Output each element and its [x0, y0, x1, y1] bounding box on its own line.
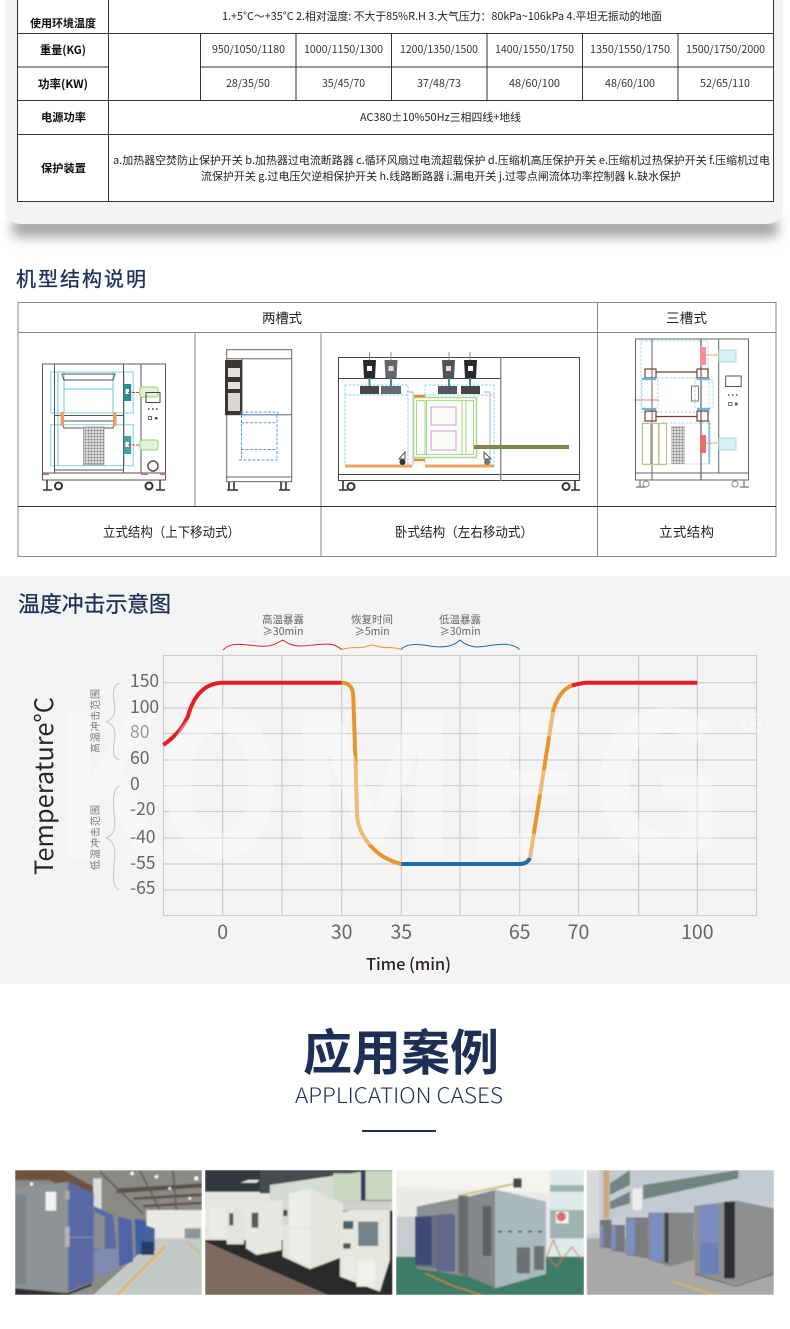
heading: temperature shock diagram: 温度冲击示意图 [18, 587, 171, 619]
heading: model structure: 机型结构说明 [16, 263, 146, 292]
section background [0, 576, 790, 984]
y axis title: Temperature°C [25, 697, 61, 875]
brand watermark [52, 627, 772, 915]
y axis labels: 0 [130, 771, 140, 796]
table row: power: 52/65/110 [700, 76, 750, 91]
drawing: vertical two-zone side view [225, 350, 292, 490]
table row: protection devices [41, 152, 770, 184]
table row: power supply [41, 109, 521, 125]
y axis labels: -55 [130, 850, 156, 875]
table row: weight: 1000/1150/1300 [304, 42, 383, 57]
stage labels: ≥30min [439, 624, 481, 639]
table row: weight: 重量(KG) [40, 42, 86, 58]
panel background [5, 0, 783, 224]
table row: weight: 1500/1750/2000 [686, 42, 765, 57]
table row: protection devices: a.加热器空焚防止保护开关 b.加热器过电流断路器 c.循环风扇过电流超载保护 d.压缩机高压保护开关 e.压缩机过热保护开关 f.压缩机过电 [113, 152, 770, 168]
y axis labels: -65 [130, 875, 156, 900]
range braces [106, 683, 120, 890]
brand watermark: M [284, 629, 462, 915]
table row: weight [40, 42, 765, 58]
drawing: three-zone structure [634, 339, 749, 487]
x axis title: Time (min) [366, 951, 451, 975]
drawing: horizontal structure [338, 352, 580, 490]
caption: horizontal left-right: 卧式结构（左右移动式） [395, 521, 533, 541]
y axis labels [130, 668, 159, 900]
table row: power: 35/45/70 [322, 76, 365, 91]
range labels [87, 689, 102, 870]
table row: environment [30, 8, 662, 31]
table row: protection devices: 流保护开关 g.过电压欠逆相保护开关 h.线路断路器 i.漏电开关 j.过零点闸流体功率控制器 k.缺水保护 [201, 168, 681, 184]
x axis labels: 70 [568, 916, 589, 945]
x axis labels: 65 [509, 916, 531, 945]
x axis labels: 100 [681, 916, 714, 945]
spec table panel [5, 0, 783, 237]
table row: power: 48/60/100 [509, 76, 560, 91]
y axis labels: 80 [130, 719, 149, 744]
x axis labels [217, 916, 714, 945]
y axis labels: 100 [130, 694, 159, 719]
brand watermark: K [52, 629, 165, 915]
table grid [18, 0, 774, 202]
photo 2: white chambers showroom [205, 1170, 392, 1295]
table row: power: 37/48/73 [417, 76, 461, 91]
y axis labels: 60 [130, 745, 149, 770]
brand watermark: G [590, 627, 725, 913]
photo 1: factory aisle [15, 1170, 202, 1295]
table row: weight: 950/1050/1180 [212, 42, 285, 57]
chart grid [164, 656, 756, 916]
stage labels [262, 612, 481, 639]
table row: power: 28/35/50 [226, 76, 270, 91]
brand watermark: O [158, 627, 282, 913]
application cases heading: 应用案例 [303, 1014, 499, 1085]
y axis labels: -20 [130, 796, 156, 821]
table row: power supply: 电源功率 [41, 109, 86, 125]
x axis labels: 0 [217, 916, 228, 945]
drawing: vertical two-zone front view [42, 364, 166, 490]
photo 3: large grey chamber [396, 1170, 584, 1295]
structure table grid [18, 302, 776, 556]
caption: vertical up-down: 立式结构（上下移动式） [103, 521, 240, 541]
stage labels: 恢复时间 [351, 612, 393, 627]
y axis labels: -40 [130, 824, 156, 849]
structure table [18, 302, 776, 556]
brand watermark: ® [740, 701, 772, 756]
table row: environment: 1.+5°C～+35°C 2.相对湿度: 不大于85%R.H 3.大气压力：80kPa~106kPa 4.平坦无振动的地面 [222, 8, 662, 24]
x axis labels: 35 [390, 916, 412, 945]
column header: three-zone: 三槽式 [666, 307, 708, 327]
table row: weight: 1350/1550/1750 [590, 42, 670, 57]
temperature shock section [0, 576, 790, 984]
stage braces [223, 640, 520, 650]
table row: protection devices: 保护装置 [41, 160, 86, 176]
heading divider [362, 1130, 436, 1132]
table row: power supply: AC380±10%50Hz三相四线+地线 [360, 109, 521, 125]
stage labels: ≥30min [262, 624, 304, 639]
table row: weight: 1400/1550/1750 [495, 42, 574, 57]
brand watermark: E [458, 629, 594, 915]
stage labels: 低温暴露 [439, 612, 481, 627]
temperature curve [163, 683, 697, 864]
table row: power [38, 76, 750, 92]
stage labels: ≥5min [354, 624, 390, 639]
y axis labels: 150 [130, 668, 159, 693]
table row: environment: 使用环境温度 [30, 15, 96, 31]
application cases subtitle: APPLICATION CASES [295, 1080, 503, 1110]
x axis labels: 30 [331, 916, 353, 945]
panel shadow [12, 218, 778, 237]
photo 4: outdoor chambers row [586, 1170, 774, 1295]
stage labels: 高温暴露 [262, 612, 304, 627]
column header: two-zone: 两槽式 [262, 307, 302, 327]
range labels: 低温冲击范围 [87, 805, 102, 870]
table row: power: 功率(KW) [38, 76, 88, 92]
table row: weight: 1200/1350/1500 [400, 42, 478, 57]
table row: power: 48/60/100 [605, 76, 655, 91]
range labels: 高温冲击范围 [87, 689, 102, 753]
caption: vertical: 立式结构 [659, 521, 714, 541]
